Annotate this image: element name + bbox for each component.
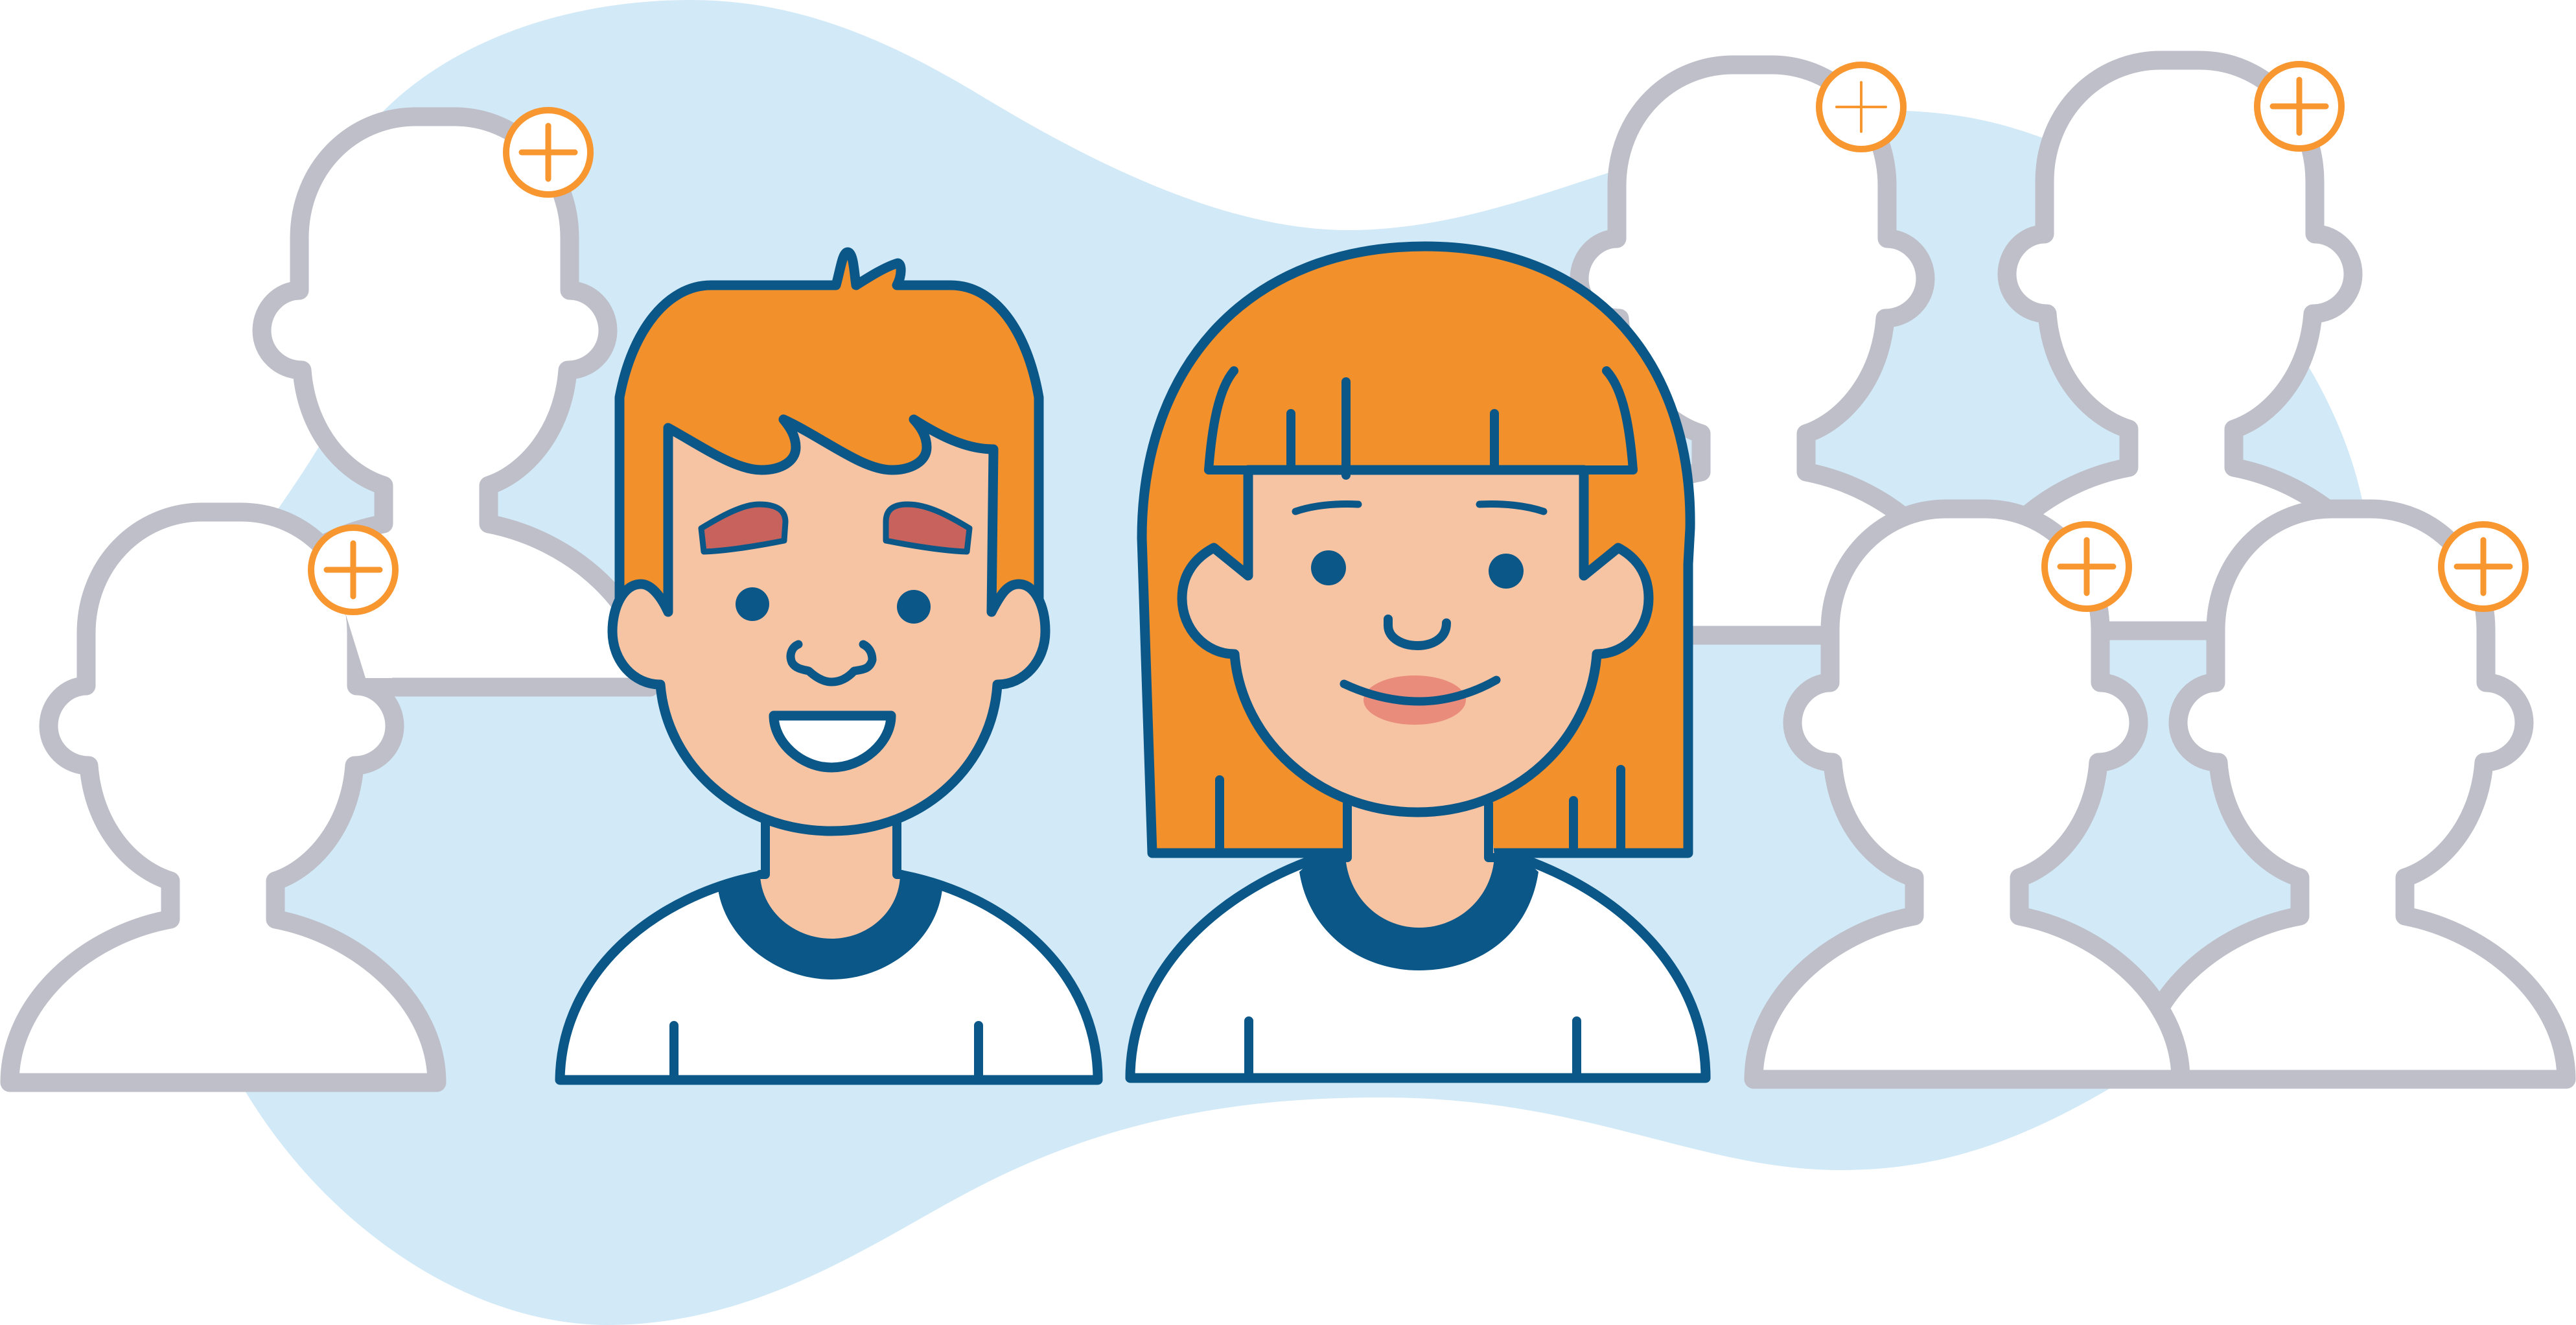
- boy shirt seams: [674, 1026, 979, 1080]
- boy left eyelid: [701, 504, 785, 552]
- boy collar: [718, 872, 942, 979]
- girl collar: [1299, 854, 1538, 970]
- girl neck: [1345, 801, 1494, 928]
- girl hair: [1142, 246, 1690, 853]
- boy figure: [560, 252, 1098, 1080]
- girl mouth: [1344, 680, 1496, 701]
- white overlap patch: [345, 609, 392, 678]
- boy eyes: [736, 587, 931, 624]
- girl hair strands: [1220, 769, 1621, 853]
- plus badge: front right: [2045, 524, 2129, 609]
- plus badge: back right 2: [2257, 64, 2341, 148]
- boy shirt: [560, 874, 1098, 1080]
- boy nose: [791, 644, 872, 682]
- plus badge: bottom left: [311, 528, 395, 612]
- silhouette: front far right: [2139, 509, 2566, 1079]
- silhouette: front right: [1754, 509, 2181, 1079]
- girl shirt seams: [1249, 1021, 1577, 1078]
- silhouette: back right 2: [1968, 60, 2395, 631]
- silhouette: top left: [223, 117, 650, 687]
- girl lips: [1363, 675, 1466, 725]
- boy mouth: [774, 716, 891, 768]
- boy right eyelid: [886, 504, 969, 552]
- boy neck: [760, 817, 900, 939]
- boy face: [612, 419, 1045, 831]
- silhouette: back right 1: [1540, 65, 1967, 635]
- girl shirt: [1130, 858, 1706, 1078]
- girl fringe: [1209, 371, 1633, 475]
- plus badge: front far right: [2441, 524, 2525, 609]
- girl neck lines: [1343, 804, 1494, 858]
- boy hair: [620, 252, 1039, 600]
- girl nose: [1388, 619, 1446, 646]
- girl figure: [1130, 246, 1706, 1078]
- plus badge: back right 1: [1819, 65, 1903, 149]
- boy neck lines: [760, 820, 901, 874]
- girl eyebrows: [1295, 504, 1544, 511]
- silhouette: bottom left: [10, 512, 437, 1083]
- girl face: [1182, 470, 1649, 812]
- girl eyes: [1311, 550, 1524, 589]
- plus badge: top left: [506, 110, 590, 194]
